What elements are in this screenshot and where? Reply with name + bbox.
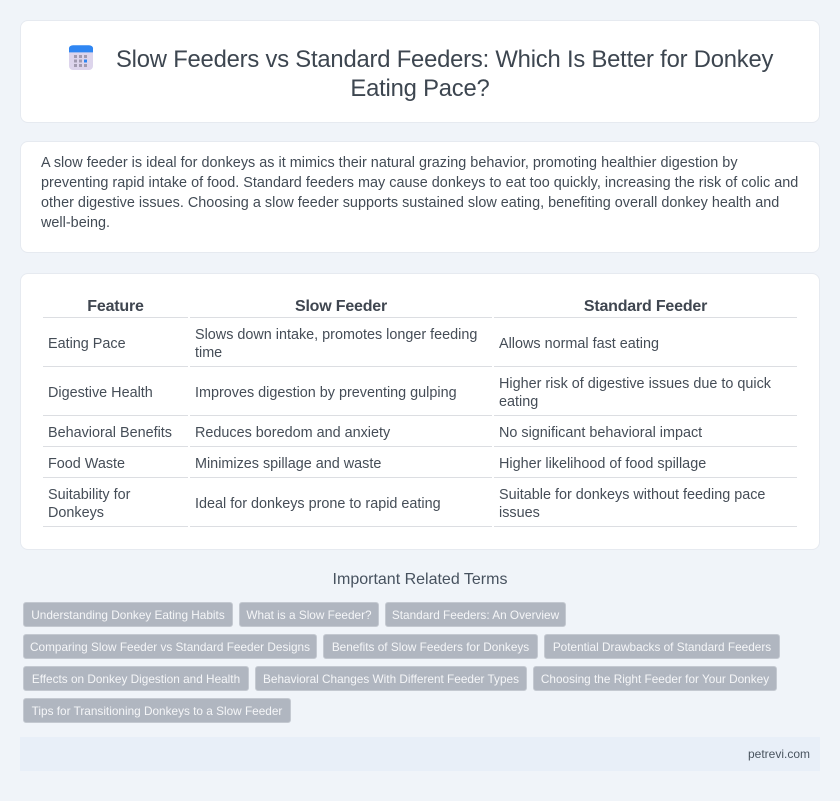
related term tags: Understanding Donkey Eating Habits: [31, 608, 225, 622]
comparison table: eating: [499, 394, 538, 410]
related term tags: [23, 602, 780, 723]
comparison table: Ideal for donkeys prone to rapid eating: [195, 496, 441, 512]
row: behavioral benefits: Behavioral Benefits: [48, 425, 172, 441]
title: Slow Feeders vs Standard Feeders: Which Is Better for Donkey: [116, 46, 773, 73]
table card: [20, 273, 820, 550]
comparison table: Minimizes spillage and waste: [195, 456, 381, 472]
related term tags: Comparing Slow Feeder vs Standard Feeder Designs: [30, 640, 310, 654]
intro paragraph: other digestive issues. Choosing a slow feeder supports sustained slow eating, benefiting overall donkey health and: [41, 195, 779, 211]
title: Eating Pace?: [350, 75, 490, 102]
intro paragraph: [41, 155, 798, 231]
row: food waste: Food Waste: [48, 456, 125, 472]
footer bar: [20, 737, 820, 771]
intro paragraph: A slow feeder is ideal for donkeys as it mimics their natural grazing behavior, promoting healthier digestion by: [41, 155, 738, 171]
comparison table: Allows normal fast eating: [499, 336, 659, 352]
comparison table: Slow Feeder: [295, 298, 387, 315]
table header: Feature: [87, 298, 144, 315]
comparison table: Higher risk of digestive issues due to quick: [499, 376, 771, 392]
related term tags: Potential Drawbacks of Standard Feeders: [553, 640, 771, 654]
footer source: petrevi.com: [748, 747, 810, 761]
row: eating pace: Eating Pace: [48, 336, 126, 352]
row: suitability: Donkeys: [48, 505, 104, 521]
related term tags: Benefits of Slow Feeders for Donkeys: [332, 640, 529, 654]
related term tags: Behavioral Changes With Different Feeder Types: [263, 672, 519, 686]
icon: calendar grid: [68, 45, 94, 70]
intro card: [20, 141, 820, 253]
related term tags: Effects on Donkey Digestion and Health: [32, 672, 240, 686]
comparison table: Slows down intake, promotes longer feeding: [195, 327, 477, 343]
intro paragraph: well-being.: [41, 215, 110, 231]
comparison table: Improves digestion by preventing gulping: [195, 385, 457, 401]
comparison table: Suitable for donkeys without feeding pace: [499, 487, 765, 503]
comparison table: [43, 298, 797, 527]
row: digestive health: Digestive Health: [48, 385, 153, 401]
comparison table: Standard Feeder: [584, 298, 707, 315]
comparison table: time: [195, 345, 222, 361]
related term tags: What is a Slow Feeder?: [246, 608, 372, 622]
comparison table: Reduces boredom and anxiety: [195, 425, 390, 441]
related term tags: Choosing the Right Feeder for Your Donkey: [541, 672, 769, 686]
row: suitability: [48, 487, 130, 521]
comparison table: Higher likelihood of food spillage: [499, 456, 706, 472]
comparison table: No significant behavioral impact: [499, 425, 702, 441]
title: [116, 46, 774, 102]
related terms heading: Important Related Terms: [333, 571, 507, 588]
related term tags: Tips for Transitioning Donkeys to a Slow Feeder: [32, 704, 282, 718]
related term tags: Standard Feeders: An Overview: [392, 608, 559, 622]
comparison table: issues: [499, 505, 540, 521]
row: suitability: Suitability for: [48, 487, 130, 503]
header card: [20, 20, 820, 123]
intro paragraph: preventing rapid intake of food. Standard feeders may cause donkeys to eat too quickly, increasing the risk of colic and: [41, 175, 798, 191]
